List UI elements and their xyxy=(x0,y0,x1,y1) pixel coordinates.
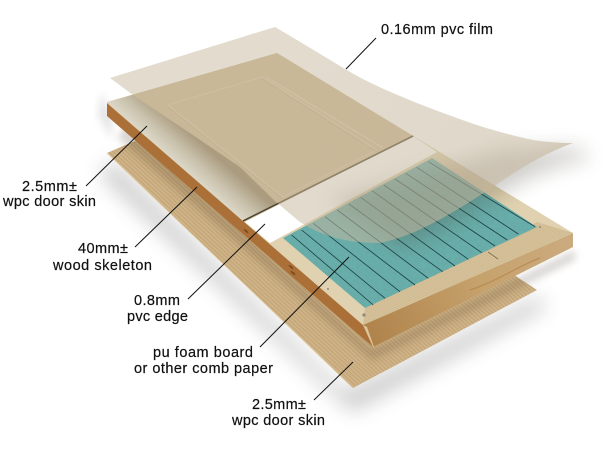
label: upper 2.5mm wpc door skin: 2.5mm± xyxy=(22,179,77,195)
label: pu foam board or other comb paper xyxy=(134,345,273,377)
label: pu foam board or other comb paper: pu foam board xyxy=(153,345,253,361)
left side face xyxy=(107,103,373,347)
upper wpc door skin xyxy=(107,53,413,221)
leader lines xyxy=(86,38,376,400)
wood skeleton frame xyxy=(107,53,573,347)
label: pu foam board or other comb paper: or other comb paper xyxy=(134,361,273,377)
right side face xyxy=(363,233,573,347)
embossed door panel xyxy=(168,77,383,199)
label: 0.16mm pvc film: 0.16mm pvc film xyxy=(381,22,493,38)
shadow under lower door skin xyxy=(100,160,545,412)
pu foam board xyxy=(283,158,537,308)
lower wpc door skin xyxy=(107,130,537,388)
pvc film xyxy=(110,27,573,243)
label: lower 2.5mm wpc door skin: wpc door skin xyxy=(231,413,325,429)
foam grooves xyxy=(292,162,535,305)
right rail grain xyxy=(363,222,573,325)
shadow left of board xyxy=(98,92,112,140)
side streaks xyxy=(470,258,540,290)
skin edge shadow xyxy=(243,136,413,221)
label: lower 2.5mm wpc door skin xyxy=(231,397,325,429)
wood top face xyxy=(107,53,573,325)
wood knots xyxy=(243,228,296,276)
label: upper 2.5mm wpc door skin: wpc door skin xyxy=(2,194,96,210)
corner end grain xyxy=(363,325,374,347)
white pvc edge xyxy=(245,136,437,243)
exposed light skin edge xyxy=(107,95,277,221)
label: 0.8mm pvc edge xyxy=(127,293,188,325)
film shadow on board and background xyxy=(330,148,590,248)
label: 40mm wood skeleton: wood skeleton xyxy=(52,258,152,274)
label: 40mm wood skeleton xyxy=(52,241,152,274)
label: 0.8mm pvc edge: pvc edge xyxy=(127,309,188,325)
label: lower 2.5mm wpc door skin: 2.5mm± xyxy=(252,397,306,413)
label: upper 2.5mm wpc door skin xyxy=(2,179,96,210)
label: 0.8mm pvc edge: 0.8mm xyxy=(134,293,180,309)
nail marks xyxy=(327,226,541,317)
label: 40mm wood skeleton: 40mm± xyxy=(78,241,128,257)
shadow cast by board on lower skin xyxy=(118,125,575,360)
